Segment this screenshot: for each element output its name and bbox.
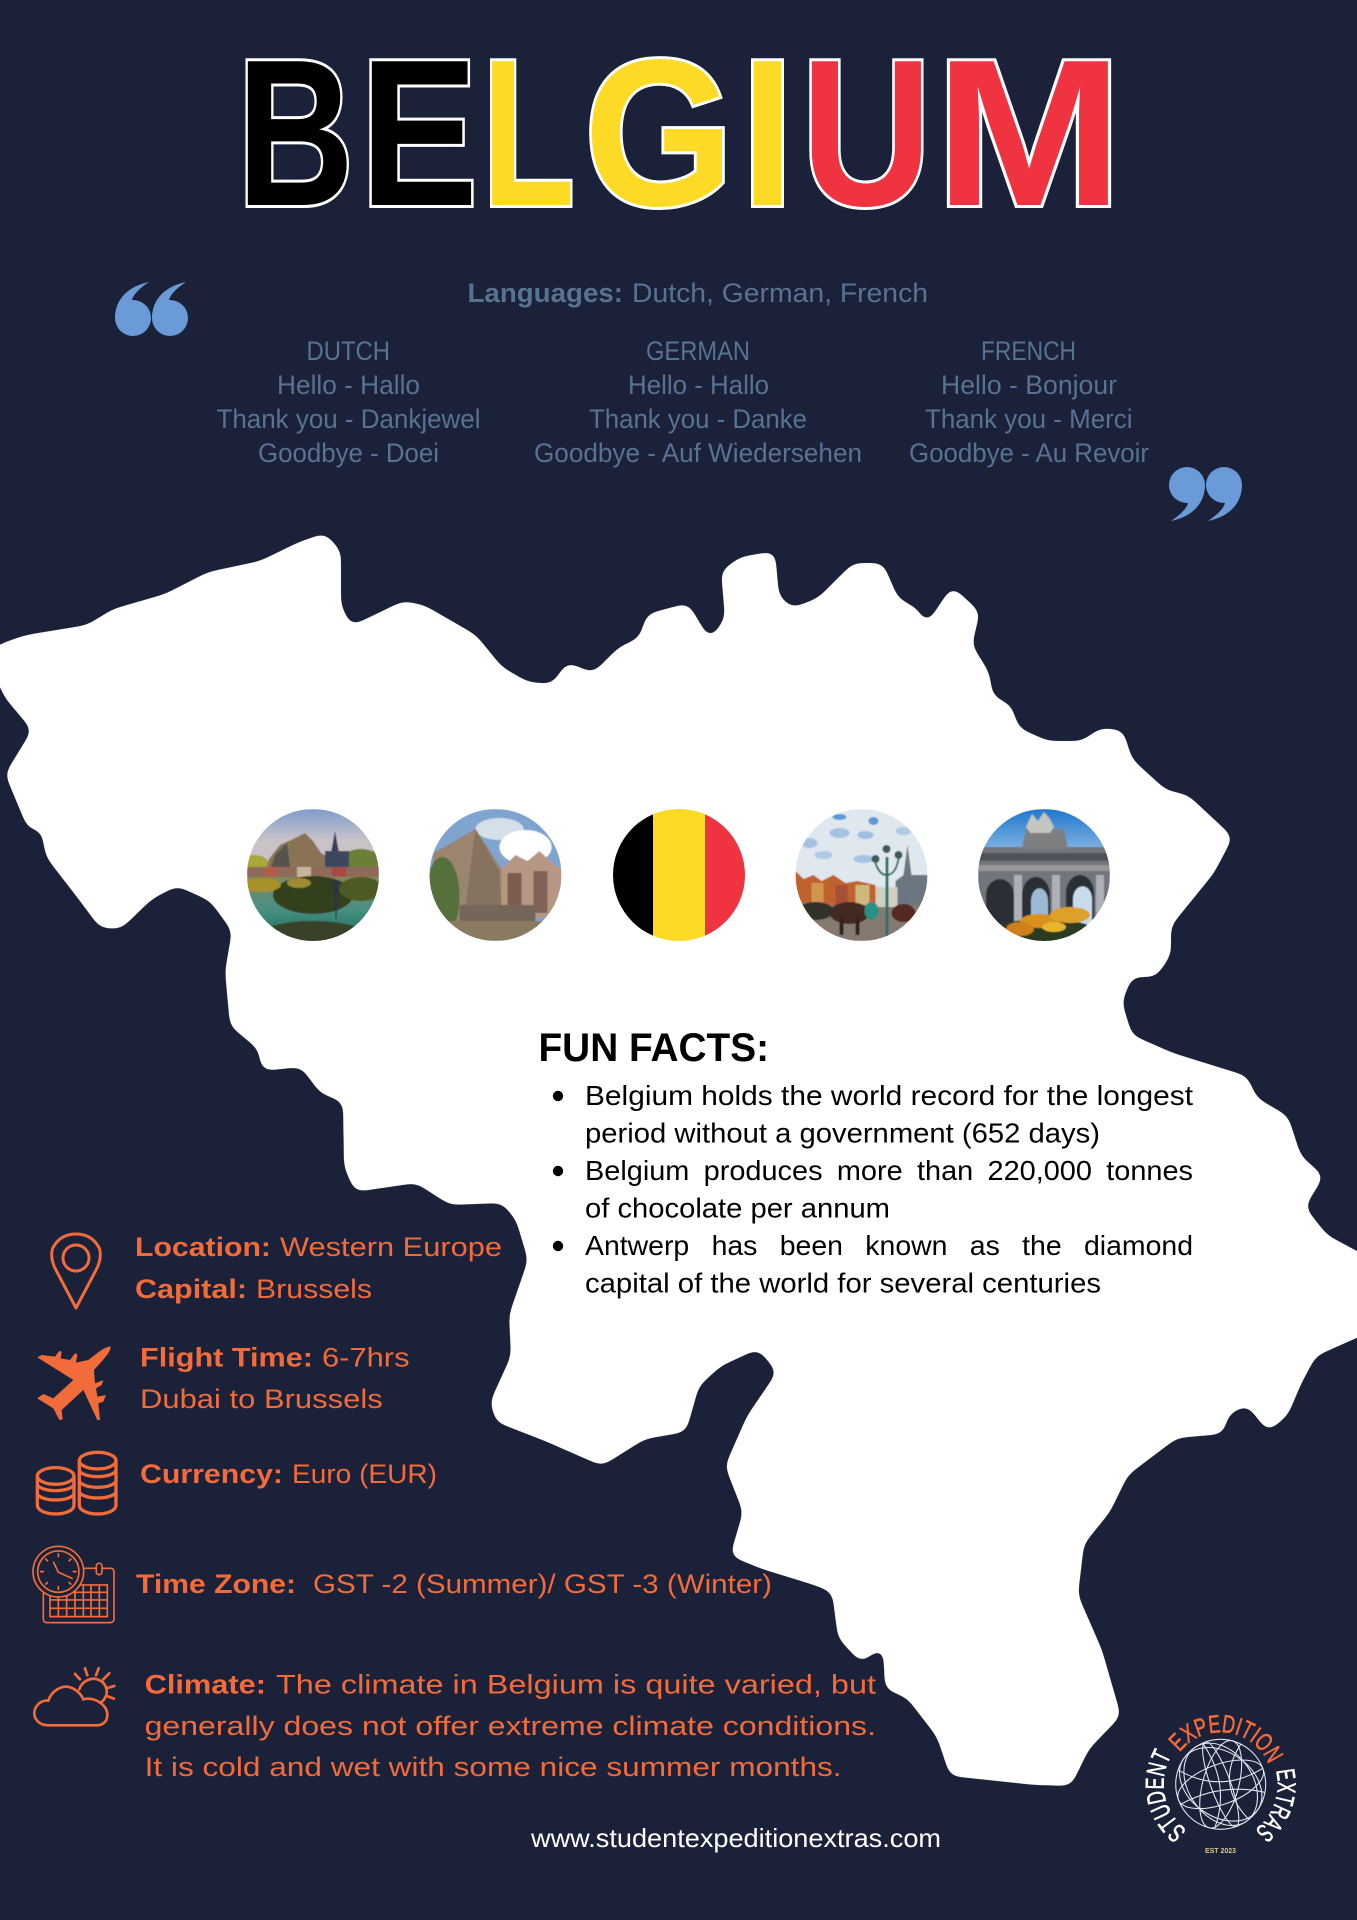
icon: clock and calendar [33, 1546, 114, 1623]
website url: www.studentexpeditionextras.com [530, 1823, 941, 1853]
language column: Dutch [216, 336, 480, 468]
logo text: EXTRAS: EXTRAS [1256, 1768, 1296, 1842]
bullet fact 1: period without a government (652 days) [585, 1118, 1100, 1148]
logo: Student Expedition Extras [1145, 1714, 1296, 1855]
location and capital text: Brussels [256, 1274, 372, 1304]
language column: French: Thank you - Merci [925, 404, 1132, 434]
language column: French: Hello - Bonjour [941, 370, 1117, 400]
fun facts list [553, 1080, 1193, 1298]
climate text [145, 1670, 877, 1782]
logo text: established year: EST 2023 [1205, 1846, 1236, 1855]
logo text: EXPEDITION: EXPEDITION [1168, 1714, 1284, 1764]
icon: closing quotation mark [1169, 467, 1242, 521]
currency text [140, 1459, 437, 1489]
photo: Bruges market square [796, 809, 928, 941]
flight time text: Flight Time: [140, 1342, 313, 1372]
bullet fact 1: Belgium holds the world record for the longest [585, 1080, 1193, 1111]
language column: German: GERMAN [646, 336, 750, 366]
currency text: Euro (EUR) [292, 1459, 437, 1489]
language column: Dutch: Hello - Hallo [277, 370, 420, 400]
location and capital text: Capital: [135, 1274, 247, 1304]
language column: German: Goodbye - Auf Wiedersehen [534, 438, 862, 468]
bullet fact 2: Belgium produces more than 220,000 tonnes [585, 1155, 1193, 1186]
title: BELGIUM [237, 17, 1123, 250]
climate text: Climate: [145, 1670, 266, 1700]
location and capital text: Location: [135, 1232, 271, 1262]
language column: German: Thank you - Danke [589, 404, 807, 434]
photo: Dinant riverside [247, 809, 379, 941]
language column: German: Hello - Hallo [628, 370, 769, 400]
bullet fact 1 [553, 1080, 1193, 1148]
flight time text [140, 1342, 410, 1414]
time zone text: Time Zone: [136, 1569, 296, 1599]
title: BELGIUM: I [741, 17, 794, 250]
currency text: Currency: [140, 1459, 283, 1489]
flight time text: Dubai to Brussels [140, 1384, 383, 1414]
location and capital text [135, 1232, 502, 1304]
bullet fact 2 [553, 1155, 1193, 1224]
title: BELGIUM: E [360, 17, 478, 250]
bullet fact 3: capital of the world for several centuries [585, 1268, 1101, 1298]
photo: Belgian flag circle [613, 809, 745, 941]
language column: Dutch: Thank you - Dankjewel [216, 404, 480, 434]
languages heading [468, 278, 928, 308]
climate text: It is cold and wet with some nice summer months. [145, 1752, 842, 1782]
photo: Bruges canal houses [426, 809, 562, 941]
heading: fun facts: FUN FACTS: [538, 1026, 769, 1070]
icon: airplane [37, 1347, 111, 1420]
bullet fact 2: of chocolate per annum [585, 1192, 890, 1224]
map of Belgium [0, 533, 1357, 1786]
title: BELGIUM: M [935, 17, 1123, 250]
icon: opening quotation mark [115, 282, 188, 336]
time zone text: GST -2 (Summer)/ GST -3 (Winter) [313, 1569, 772, 1599]
location and capital text: Western Europe [280, 1232, 502, 1262]
icon: location pin [52, 1234, 100, 1308]
title: BELGIUM: L [482, 17, 575, 250]
language column: Dutch: Goodbye - Doei [258, 438, 439, 468]
languages heading: Dutch, German, French [632, 278, 928, 308]
bullet fact 3: Antwerp has been known as the diamond [585, 1230, 1193, 1261]
icon: cloud and sun [34, 1668, 114, 1725]
language column: French [909, 336, 1149, 468]
flight time text: 6-7hrs [322, 1342, 410, 1372]
title: BELGIUM: B [237, 17, 354, 250]
language column: German [534, 336, 862, 468]
logo globe [1165, 1729, 1276, 1840]
language column: French: FRENCH [981, 336, 1076, 366]
photo: Cinquantenaire arch [978, 809, 1110, 955]
climate text: The climate in Belgium is quite varied, but [276, 1670, 877, 1700]
bullet fact 3 [553, 1230, 1193, 1298]
time zone text [136, 1569, 772, 1599]
icon: coin stacks [37, 1452, 116, 1514]
language column: French: Goodbye - Au Revoir [909, 438, 1149, 468]
title: BELGIUM: U [801, 17, 932, 250]
language column: Dutch: DUTCH [306, 336, 390, 366]
climate text: generally does not offer extreme climate conditions. [145, 1711, 876, 1741]
title: BELGIUM: G [584, 17, 734, 250]
logo text: STUDENT: STUDENT [1145, 1748, 1185, 1842]
languages heading: Languages: [468, 278, 623, 308]
